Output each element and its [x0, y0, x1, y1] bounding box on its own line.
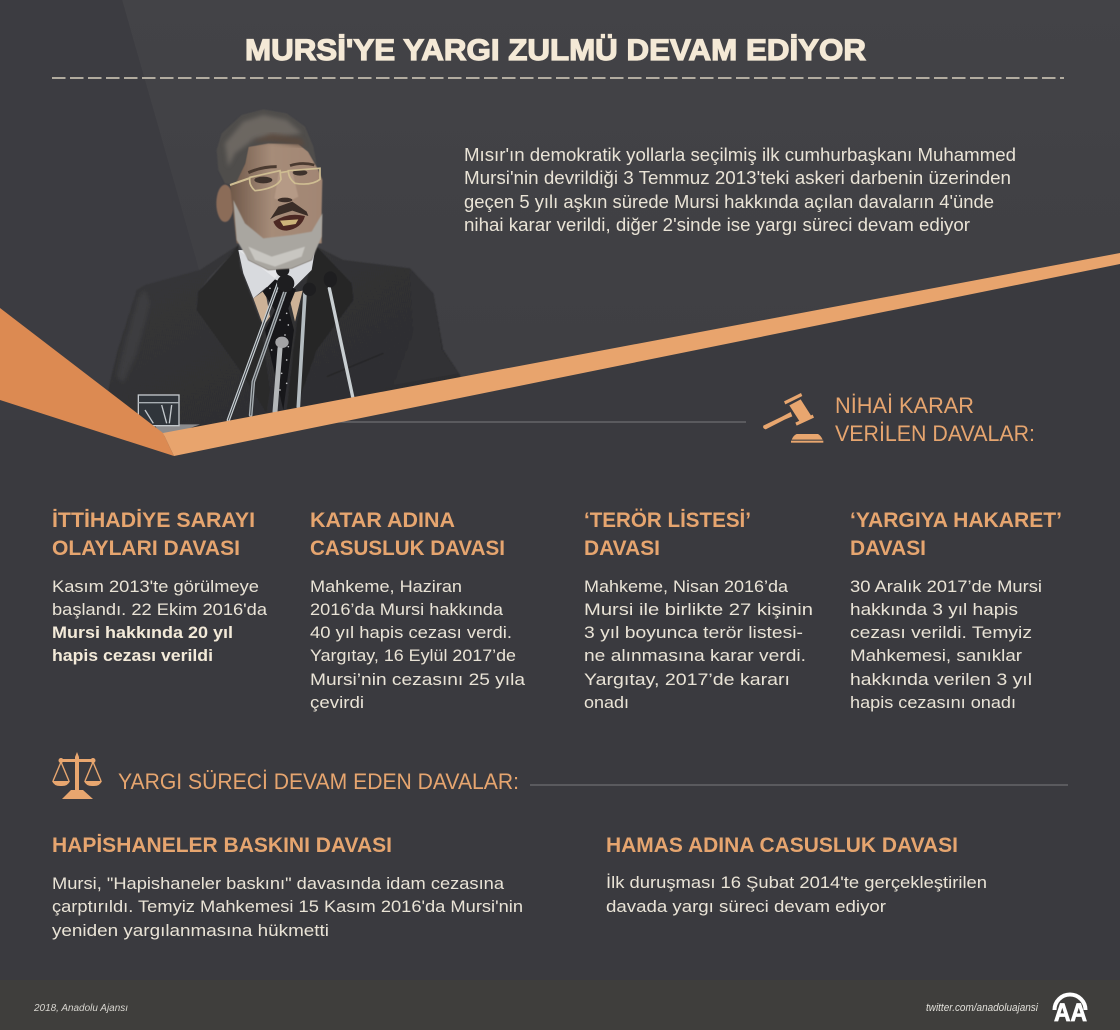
- case: İttihadiye Sarayı: Mursi hakkında 20 yıl: [52, 623, 233, 642]
- case: Hamas adına casusluk: HAMAS ADINA CASUSLUK DAVASI: [606, 834, 958, 857]
- case: Katar adına casusluk: çevirdi: [310, 693, 364, 712]
- neck shadow: [242, 240, 318, 270]
- footer credit: 2018, Anadolu Ajansı: [33, 1003, 128, 1014]
- case: Hamas adına casusluk: İlk duruşması 16 Şubat 2014'te gerçekleştirilen: [606, 873, 987, 892]
- case: Hamas adına casusluk: [606, 834, 987, 916]
- icon: gavel: [763, 393, 823, 443]
- case: Terör listesi: ‘TERÖR LİSTESİ’: [584, 509, 751, 532]
- orange band: right light facet: [163, 253, 1120, 456]
- case: Katar adına casusluk: [310, 509, 526, 712]
- case: Terör listesi: [584, 509, 813, 712]
- heading: final decisions: NİHAİ KARAR: [835, 393, 974, 418]
- case: Katar adına casusluk: Yargıtay, 16 Eylül 2017’de: [310, 646, 516, 665]
- divider: top cases: [337, 421, 746, 423]
- case: Terör listesi: Mursi ile birlikte 27 kişinin: [584, 600, 813, 619]
- case: Yargıya hakaret: hapis cezasını onadı: [850, 693, 1016, 712]
- case: Yargıya hakaret: Mahkemesi, sanıklar: [850, 646, 1022, 665]
- case: Terör listesi: ne alınmasına karar verdi.: [584, 646, 806, 665]
- heading: final decisions: [835, 393, 1035, 446]
- case: İttihadiye Sarayı: hapis cezası verildi: [52, 646, 213, 665]
- face: [230, 143, 322, 243]
- intro text: [464, 145, 1016, 235]
- suit jacket: [108, 245, 460, 437]
- ear: [216, 185, 234, 222]
- eyebrows: [248, 167, 277, 173]
- logo: Anadolu Agency: AA: [1054, 999, 1087, 1027]
- case: Terör listesi: Mahkeme, Nisan 2016’da: [584, 577, 789, 596]
- case: Katar adına casusluk: 40 yıl hapis cezası verdi.: [310, 623, 512, 642]
- case: Yargıya hakaret: hakkında 3 yıl hapis: [850, 600, 1018, 619]
- case: Katar adına casusluk: KATAR ADINA: [310, 509, 455, 532]
- intro text: Mursi'nin devrildiği 3 Temmuz 2013'teki askeri darbenin üzerinden: [464, 168, 1011, 188]
- intro text: Mısır'ın demokratik yollarla seçilmiş ilk cumhurbaşkanı Muhammed: [464, 145, 1016, 165]
- mustache and mouth: [270, 202, 308, 219]
- case: İttihadiye Sarayı: [52, 509, 268, 665]
- case: Yargıya hakaret: ‘YARGIYA HAKARET’: [850, 509, 1062, 532]
- case: Yargıya hakaret: DAVASI: [850, 537, 926, 560]
- case: Hapishaneler baskını: çarptırıldı. Temyiz Mahkemesi 15 Kasım 2016'da Mursi'nin: [52, 897, 523, 916]
- case: İttihadiye Sarayı: Kasım 2013'te görülmeye: [52, 577, 259, 596]
- head: [216, 109, 322, 270]
- footer bar: [0, 980, 1120, 1030]
- portrait of Muhammed Mursi at the microphones: [108, 109, 460, 437]
- case: Yargıya hakaret: cezası verildi. Temyiz: [850, 623, 1032, 642]
- eyes: [254, 177, 272, 183]
- case: Hapishaneler baskını: [52, 834, 523, 940]
- case: Terör listesi: Yargıtay, 2017’de kararı: [584, 670, 790, 689]
- case: Yargıya hakaret: 30 Aralık 2017’de Mursi: [850, 577, 1042, 596]
- case: Yargıya hakaret: hakkında verilen 3 yıl: [850, 670, 1032, 689]
- case: İttihadiye Sarayı: OLAYLARI DAVASI: [52, 537, 240, 560]
- case: Katar adına casusluk: CASUSLUK DAVASI: [310, 537, 505, 560]
- heading: final decisions: VERİLEN DAVALAR:: [835, 421, 1035, 446]
- chest: shirt, tie, microphones: [228, 250, 353, 420]
- icon: scales of justice: [52, 752, 102, 799]
- case: Terör listesi: onadı: [584, 693, 629, 712]
- case: Katar adına casusluk: Mursi’nin cezasını 25 yıla: [310, 670, 526, 689]
- intro text: nihai karar verildi, diğer 2'sinde ise yargı süreci devam ediyor: [464, 215, 970, 235]
- case: Hapishaneler baskını: yeniden yargılanmasına hükmetti: [52, 921, 329, 940]
- water glass: [138, 395, 179, 426]
- glasses: [230, 168, 320, 191]
- footer twitter: twitter.com/anadoluajansi: [926, 1002, 1038, 1014]
- nose: [274, 172, 298, 203]
- case: Yargıya hakaret: [850, 509, 1062, 712]
- orange band: left dark facet: [0, 308, 174, 456]
- case: Terör listesi: DAVASI: [584, 537, 660, 560]
- case: İttihadiye Sarayı: İTTİHADİYE SARAYI: [52, 509, 255, 532]
- case: Hapishaneler baskını: HAPİSHANELER BASKINI DAVASI: [52, 834, 392, 857]
- beard: [233, 200, 322, 270]
- heading: ongoing cases: YARGI SÜRECİ DEVAM EDEN DAVALAR:: [118, 769, 519, 794]
- case: Hamas adına casusluk: davada yargı süreci devam ediyor: [606, 897, 886, 916]
- case: İttihadiye Sarayı: başlandı. 22 Ekim 2016'da: [52, 600, 268, 619]
- case: Terör listesi: 3 yıl boyunca terör listesi-: [584, 623, 803, 642]
- intro text: geçen 5 yılı aşkın sürede Mursi hakkında açılan davaların 4'ünde: [464, 192, 994, 212]
- podium top: [155, 424, 200, 437]
- title: MURSİ'YE YARGI ZULMÜ DEVAM EDİYOR: [245, 34, 866, 67]
- hair: [217, 109, 317, 185]
- case: Hapishaneler baskını: Mursi, "Hapishaneler baskını" davasında idam cezasına: [52, 874, 505, 893]
- case: Katar adına casusluk: Mahkeme, Haziran: [310, 577, 462, 596]
- case: Katar adına casusluk: 2016’da Mursi hakkında: [310, 600, 504, 619]
